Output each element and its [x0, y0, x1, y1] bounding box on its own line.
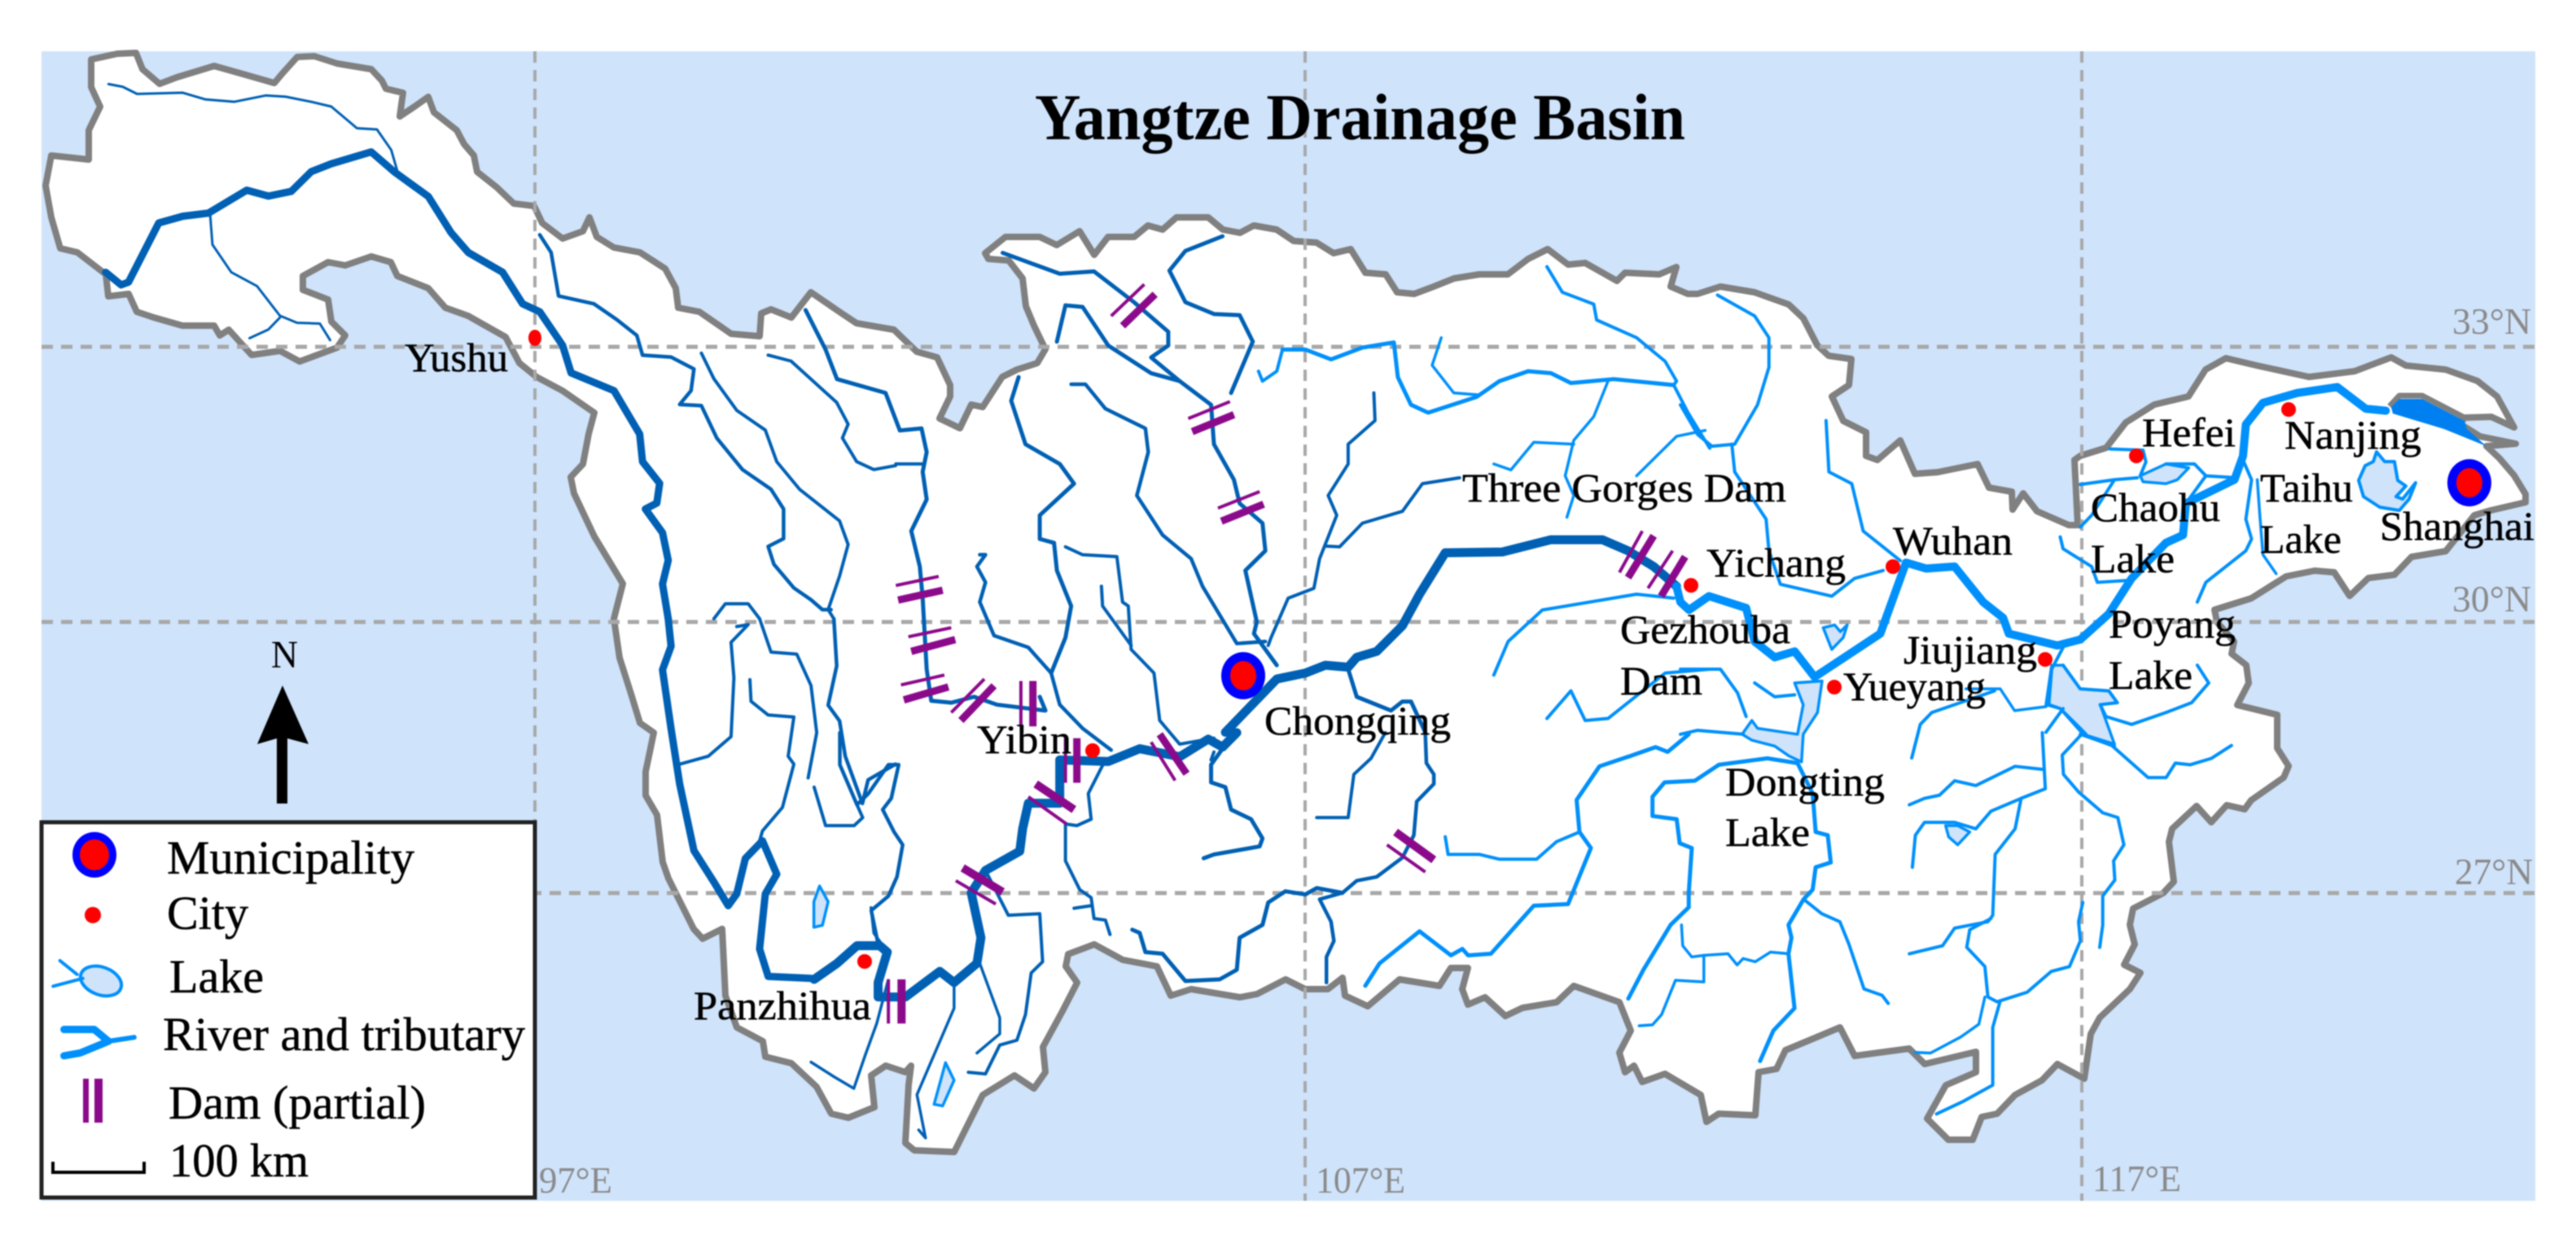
north arrow: [257, 633, 309, 804]
dark blue rivers, central: [805, 236, 1676, 760]
dark blue rivers, south-west: [663, 619, 896, 1088]
place labels: Gezhouba: [1620, 607, 1790, 652]
graticule labels: 27°N: [2455, 851, 2533, 892]
place labels: Dongting: [1725, 759, 1885, 804]
estuary north shore: [2390, 396, 2464, 418]
place labels: Yichang: [1706, 540, 1846, 585]
legend: lake: [53, 950, 264, 1003]
dams, south: [888, 784, 1434, 1023]
place labels: Lake: [2109, 652, 2193, 698]
legend: scale bar: [53, 1134, 309, 1187]
legend: lake: Lake: [169, 950, 264, 1003]
place labels: Yueyang: [1843, 663, 1986, 709]
place labels: Yushu: [405, 335, 508, 380]
place labels: Hefei: [2142, 409, 2236, 455]
place labels: Yibin: [977, 716, 1071, 762]
legend: river and tributary: River and tributary: [163, 1008, 525, 1061]
north arrow: N: [271, 633, 298, 677]
graticule labels: [539, 300, 2533, 1201]
place labels: Wuhan: [1893, 518, 2013, 563]
place labels: Shanghai: [2380, 503, 2534, 549]
graticule labels: 107°E: [1316, 1159, 1405, 1201]
lakes, east: [1742, 464, 2188, 762]
light blue rivers, south-east: [1628, 733, 2232, 1114]
city markers: [528, 330, 2296, 969]
light blue rivers, south central: [1365, 757, 1628, 986]
place labels: Lake: [2260, 516, 2342, 562]
dams, central: [896, 284, 1685, 783]
legend: city: City: [167, 887, 248, 939]
lake, far south: [934, 1062, 954, 1106]
light blue rivers, central: [1259, 267, 1710, 720]
small lake, south-west: [814, 886, 828, 927]
place labels: Poyang: [2109, 601, 2236, 646]
place labels: Panzhihua: [694, 983, 871, 1028]
light blue river network, east: [1676, 295, 2385, 758]
place labels: Lake: [2091, 536, 2175, 581]
Taihu lake: [2359, 452, 2416, 510]
municipality marker: Shanghai: [2447, 459, 2491, 506]
legend: dam: Dam (partial): [169, 1076, 426, 1129]
small lake, south-east: [1946, 826, 1969, 845]
graticule labels: 30°N: [2452, 578, 2531, 620]
graticule labels: 117°E: [2092, 1158, 2181, 1199]
legend: [42, 822, 535, 1198]
dark blue upper rivers, north-west: [106, 84, 896, 619]
title: Yangtze Drainage Basin: [1035, 82, 1685, 154]
place labels: Nanjing: [2285, 412, 2421, 458]
municipality marker: Chongqing: [1221, 652, 1265, 699]
graticule labels: 97°E: [539, 1159, 612, 1201]
place labels: Dam: [1620, 658, 1702, 703]
place labels: Jiujiang: [1904, 627, 2037, 672]
place labels: Taihu: [2260, 465, 2353, 510]
place labels: Chaohu: [2091, 484, 2220, 530]
estuary, dark blue water: [2391, 399, 2486, 446]
legend: city: [85, 887, 248, 939]
graticule labels: 33°N: [2452, 300, 2531, 342]
legend: municipality: Municipality: [167, 831, 414, 884]
place labels: Three Gorges Dam: [1462, 465, 1786, 510]
legend: scale bar: 100 km: [169, 1134, 309, 1187]
place labels: Chongqing: [1264, 698, 1451, 743]
dark blue rivers, south central: [814, 733, 1434, 1138]
place labels: [405, 335, 2534, 1028]
place labels: Lake: [1725, 809, 1810, 855]
